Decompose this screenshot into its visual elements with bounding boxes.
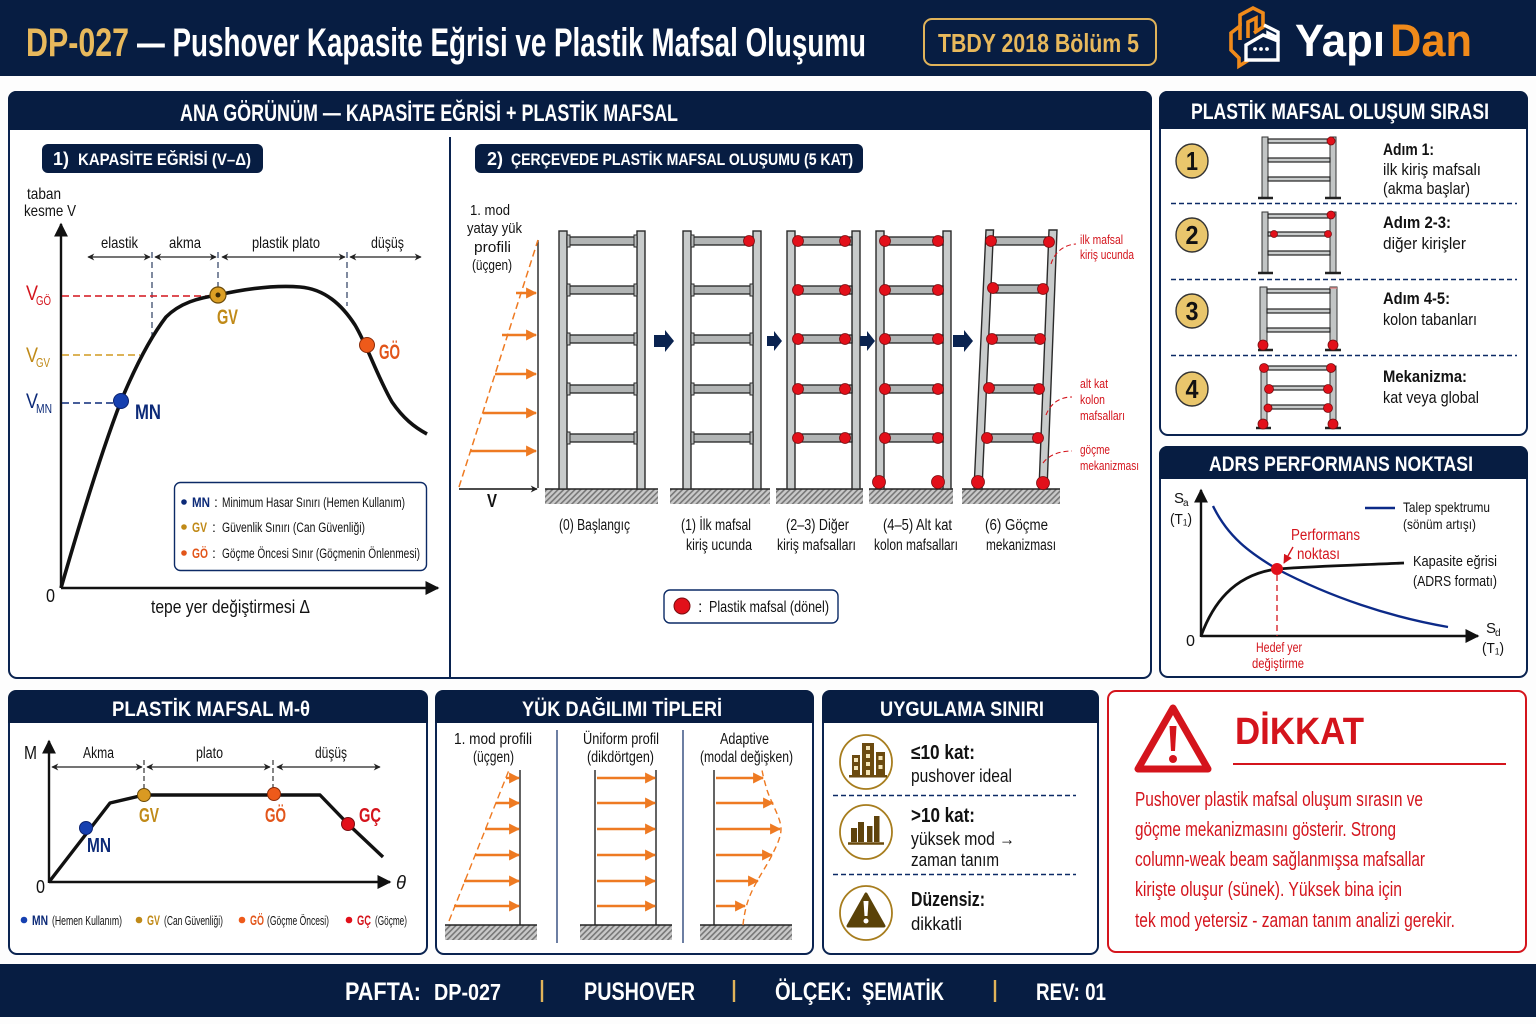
step 1: 1 [1186, 146, 1198, 176]
y labels: V [26, 282, 38, 305]
frame 3: base column hinges [869, 231, 953, 504]
limit: over 10 storeys [840, 805, 1015, 870]
chart: ADRS: noktası [1297, 546, 1340, 563]
logo: YapıDan [1231, 8, 1472, 66]
chart: M-θ: θ [396, 873, 407, 894]
point: GÖ [265, 788, 286, 827]
frame 4: collapse mechanism [962, 230, 1060, 504]
legend: performance levels [174, 482, 426, 570]
step 3: kolon tabanları [1383, 311, 1477, 329]
load type: triangular: (üçgen) [473, 749, 514, 766]
step 1: ilk kiriş mafsalı [1383, 161, 1481, 179]
panel: load distribution types [435, 690, 814, 954]
arrow: step 1 to 2 [767, 331, 782, 351]
chart: ADRS: (T₁) [1170, 511, 1192, 528]
heading: PLASTİK MAFSAL M-θ [112, 698, 310, 721]
chart: capacity curve V-Δ [24, 186, 438, 617]
chart: ADRS: (sönüm artışı) [1403, 516, 1476, 532]
logo: YapıDan: Dan [1390, 15, 1472, 66]
warning text: column-weak beam sağlanmışsa mafsallar [1135, 849, 1425, 871]
point: GV [138, 788, 159, 827]
legend: plastic hinge: Plastik mafsal (dönel) [709, 599, 829, 616]
load profile: V [487, 491, 497, 511]
curve [61, 286, 427, 588]
chart heading: capacity curve: KAPASİTE EĞRİSİ (V–Δ) [78, 150, 251, 169]
stage captions: kolon mafsalları [874, 537, 958, 554]
limit: irregular [840, 886, 985, 940]
step 2 [1176, 211, 1466, 273]
main panel heading: ANA GÖRÜNÜM — KAPASİTE EĞRİSİ + PLASTİK MAFSAL [180, 99, 678, 127]
chart heading: hinge formation [475, 144, 863, 173]
step 2: 2 [1186, 220, 1198, 250]
legend: performance levels: : [212, 545, 216, 561]
y labels: MN [36, 401, 52, 416]
point: GÖ: GÖ [379, 341, 400, 364]
title: — Pushover Kapasite Eğrisi ve Plastik Mafsal Oluşumu [137, 21, 866, 65]
legend: hinge states: (Hemen Kullanım) [52, 913, 122, 928]
stage captions: kiriş ucunda [686, 537, 752, 554]
logo: YapıDan: Yapı [1295, 15, 1385, 66]
footer bar: DP-027 [434, 979, 501, 1005]
stage captions: (6) Göçme [985, 517, 1048, 534]
warning text: göçme mekanizmasını gösterir. Strong [1135, 819, 1396, 841]
load type: uniform [580, 730, 672, 940]
point: MN: MN [87, 835, 111, 857]
callouts: red annotations: kolon [1080, 392, 1105, 407]
step 4 [1176, 364, 1479, 429]
chart: ADRS: d [1495, 628, 1501, 639]
point: GV: GV [139, 805, 159, 827]
frame 1: first hinge [670, 231, 770, 504]
point: GV [210, 287, 238, 329]
callouts: red annotations: alt kat [1080, 376, 1108, 391]
chart: ADRS [1170, 490, 1504, 671]
chart heading: capacity curve [42, 144, 263, 173]
heading: YÜK DAĞILIMI TİPLERİ [522, 697, 722, 721]
step 2: diğer kirişler [1383, 235, 1466, 253]
legend: hinge states: MN [32, 912, 48, 928]
legend: hinge states [21, 912, 407, 928]
chart: M-θ: plato [196, 745, 223, 762]
callouts: red annotations: göçme [1080, 442, 1110, 457]
load profile: 1. mod [470, 202, 510, 219]
limit: over 10 storeys: >10 kat: [911, 805, 975, 827]
legend: performance levels: Güvenlik Sınırı (Can Güvenliği) [222, 520, 365, 535]
point: MN: MN [135, 401, 161, 424]
footer bar [0, 964, 1536, 1017]
title [26, 21, 866, 65]
chart: ADRS: Talep spektrumu [1403, 499, 1490, 515]
warning heading: DİKKAT [1235, 711, 1364, 753]
step 3: Adım 4-5: [1383, 289, 1450, 308]
step 3: 3 [1186, 296, 1198, 326]
step 3 [1176, 287, 1477, 350]
chart: capacity curve V-Δ: kesme V [24, 203, 76, 220]
callouts: red annotations [1043, 232, 1139, 473]
load profile: yatay yük [467, 220, 522, 237]
chart: capacity curve V-Δ: düşüş [371, 235, 404, 252]
callouts: red annotations: mekanizması [1080, 458, 1139, 473]
point: MN [114, 394, 161, 424]
limit: irregular: dikkatli [911, 914, 962, 934]
panel: ADRS performance point [1159, 446, 1528, 677]
chart: M-θ: M [24, 743, 37, 763]
step 1: Adım 1: [1383, 140, 1434, 159]
load type: triangular [445, 731, 537, 940]
y labels: V [26, 390, 38, 413]
point: GÇ: GÇ [359, 805, 381, 827]
arrow: step 2 to 3 [860, 331, 875, 351]
chart: M-θ: 0 [36, 877, 45, 897]
load profile: profili [474, 239, 511, 256]
panel: warning [1108, 691, 1526, 952]
step 4: kat veya global [1383, 389, 1479, 407]
legend: performance levels: Minimum Hasar Sınırı (Hemen Kullanım) [222, 495, 405, 510]
chart: capacity curve V-Δ: tepe yer değiştirmesi Δ [151, 597, 310, 617]
footer bar: REV: 01 [1036, 979, 1106, 1006]
chart heading: hinge formation: 2) [487, 149, 503, 169]
warning text: Pushover plastik mafsal oluşum sırasın ve [1135, 789, 1423, 811]
legend: plastic hinge [664, 590, 838, 623]
step 4: Mekanizma: [1383, 367, 1467, 386]
chart: capacity curve V-Δ: plastik plato [252, 235, 320, 252]
arrow: step 0 to 1 [654, 330, 674, 352]
point: GÇ [342, 805, 381, 830]
chart: M-θ: Akma [83, 745, 114, 762]
panel: hinge formation order [1159, 91, 1528, 435]
stage captions: kiriş mafsalları [777, 537, 856, 554]
point: GÖ: GÖ [265, 804, 286, 827]
footer bar: PAFTA: [345, 978, 421, 1006]
stage captions: mekanizması [986, 537, 1056, 554]
step 2: Adım 2-3: [1383, 213, 1451, 232]
load type: adaptive [700, 731, 793, 940]
chart: capacity curve V-Δ: taban [27, 186, 61, 203]
legend: performance levels: : [214, 494, 218, 510]
stage captions [559, 516, 1056, 554]
warning text [1135, 789, 1455, 932]
callouts: red annotations: kiriş ucunda [1080, 247, 1135, 262]
limit: over 10 storeys: yüksek mod → [911, 829, 1015, 849]
legend: performance levels: : [212, 519, 216, 535]
limit: up to 10 storeys: ≤10 kat: [911, 742, 975, 764]
step 1: (akma başlar) [1383, 180, 1470, 198]
chart: M-θ [24, 741, 407, 897]
chart: M-θ: düşüş [315, 745, 347, 762]
chart: ADRS: (ADRS formatı) [1413, 574, 1497, 590]
chart: ADRS: Kapasite eğrisi [1413, 554, 1497, 570]
legend: performance levels: Göçme Öncesi Sınır (Göçmenin Önlenmesi) [222, 546, 420, 561]
limit: up to 10 storeys [840, 735, 1012, 789]
icon: warning triangle [1138, 708, 1208, 769]
limit: up to 10 storeys: pushover ideal [911, 766, 1012, 786]
stage captions: (2–3) Diğer [786, 517, 849, 534]
callouts: red annotations: mafsalları [1080, 408, 1125, 423]
load type: adaptive: Adaptive [720, 731, 769, 748]
legend: hinge states: GV [147, 912, 160, 928]
stage captions: (4–5) Alt kat [883, 517, 953, 534]
chart: capacity curve V-Δ: elastik [101, 235, 139, 252]
frame 2: other beam hinges [776, 231, 863, 504]
frame 0: initial [545, 231, 658, 504]
chart: ADRS: (T₁) [1482, 640, 1504, 657]
footer bar: PUSHOVER [584, 978, 695, 1006]
legend: performance levels: GÖ [192, 545, 208, 561]
legend: hinge states: (Göçme Öncesi) [267, 913, 329, 928]
panel: plastic hinge M-θ [8, 690, 428, 954]
chart: ADRS: a [1183, 498, 1189, 509]
step 1 [1176, 137, 1481, 198]
point: GÖ [360, 338, 400, 364]
panel: application limit [822, 690, 1099, 954]
y labels [26, 282, 52, 416]
chart: ADRS: Hedef yer [1256, 640, 1302, 655]
limit: irregular: Düzensiz: [911, 889, 985, 911]
point: MN [80, 822, 111, 857]
point: GV: GV [217, 306, 238, 329]
legend: hinge states: (Can Güvenliği) [164, 913, 223, 928]
chart: capacity curve V-Δ: akma [169, 235, 201, 252]
callouts: red annotations: ilk mafsal [1080, 232, 1123, 247]
code badge [924, 19, 1156, 65]
load profile [459, 202, 538, 511]
legend: hinge states: GÇ [357, 912, 371, 928]
chart heading: capacity curve: 1) [53, 149, 69, 169]
heading: UYGULAMA SINIRI [880, 698, 1044, 721]
limit: over 10 storeys: zaman tanım [911, 850, 999, 870]
step 4: 4 [1186, 374, 1199, 404]
stage captions: (1) İlk mafsal [681, 516, 751, 534]
warning text: kirişte oluşur (sünek). Yüksek bina için [1135, 879, 1402, 901]
y labels: GV [36, 355, 50, 370]
load profile: (üçgen) [472, 257, 512, 274]
chart: ADRS: Performans [1291, 527, 1360, 544]
y labels: GÖ [36, 293, 51, 308]
footer bar: ŞEMATİK [862, 978, 944, 1006]
chart: ADRS: değiştirme [1252, 656, 1304, 671]
legend: hinge states: (Göçme) [375, 913, 407, 928]
chart: ADRS: S [1486, 620, 1496, 637]
legend: hinge states: GÖ [250, 912, 264, 928]
panel: main view [8, 91, 1152, 678]
legend: performance levels: MN [192, 494, 210, 510]
legend: plastic hinge: : [698, 599, 702, 616]
load type: adaptive: (modal değişken) [700, 749, 793, 766]
chart: ADRS: S [1174, 490, 1184, 507]
arrow: step 3 to 4 [953, 330, 973, 352]
y labels: V [26, 344, 38, 367]
header bar [0, 0, 1536, 76]
code badge: TBDY 2018 Bölüm 5 [938, 28, 1139, 58]
title: DP-027 [26, 21, 129, 65]
footer bar: ÖLÇEK: [775, 977, 852, 1006]
load type: triangular: 1. mod profili [454, 731, 532, 748]
stage captions: (0) Başlangıç [559, 517, 630, 534]
load type: uniform: Üniform profil [583, 730, 659, 748]
heading: ADRS PERFORMANS NOKTASI [1209, 453, 1473, 476]
chart heading: hinge formation: ÇERÇEVEDE PLASTİK MAFSAL OLUŞUMU (5 KAT) [511, 150, 853, 169]
chart: ADRS: 0 [1186, 633, 1195, 650]
legend: performance levels: GV [192, 519, 207, 535]
chart: capacity curve V-Δ: 0 [46, 586, 55, 606]
load type: uniform: (dikdörtgen) [587, 749, 654, 766]
warning text: tek mod yetersiz - zaman tanım analizi gerekir. [1135, 910, 1455, 932]
